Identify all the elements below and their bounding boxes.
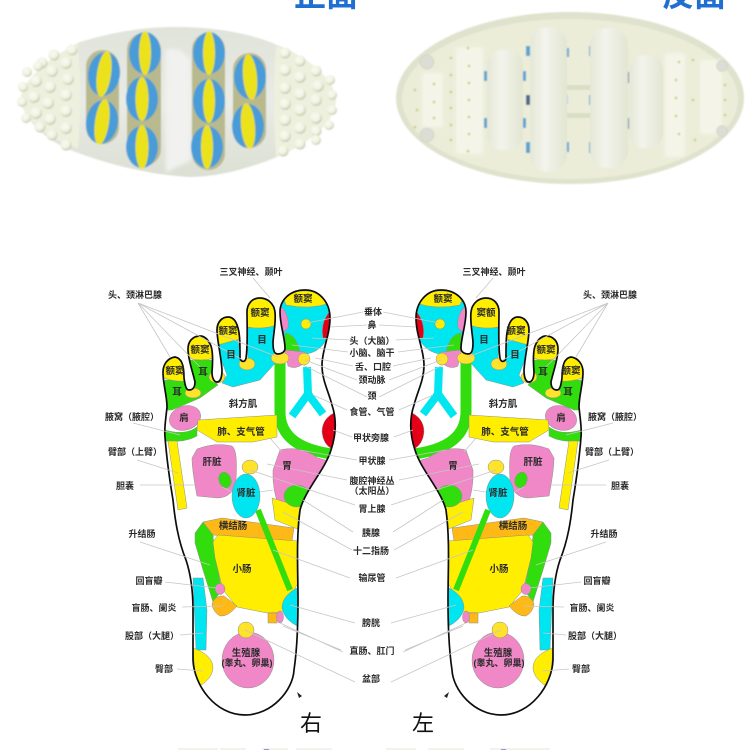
cecum [212,596,237,616]
labels inside right foot: 小肠 [232,563,252,575]
bladder [282,587,299,627]
oesophagus Y [292,367,323,416]
labels inside right foot: 斜方肌 [229,398,258,410]
labels: outer left column: 三叉神经、颞叶 [219,266,283,277]
anus [276,611,284,623]
labels inside left foot: 胃 [448,461,458,472]
caption: right foot: 右 [300,711,322,736]
rectum block [268,613,277,623]
labels: centre column: 头（大脑） [349,335,395,346]
labels inside right foot: 额窦 [293,293,313,305]
labels inside left foot: 耳 [563,387,573,398]
pancreas and duodenum [272,498,304,530]
labels inside left foot: 额窦 [433,293,453,305]
buttock [193,648,213,688]
right bump zone [274,46,337,157]
labels inside right foot: 目 [226,350,236,361]
labels inside right foot: 肩 [179,412,189,424]
labels inside right foot: 肾脏 [236,487,256,499]
back rim [396,12,744,184]
shoulder [166,402,204,434]
labels: centre column: 膀胱 [362,617,380,628]
stomach [273,449,332,510]
labels: outer right column: 回盲瓣 [583,575,611,586]
labels inside right foot: 额窦 [165,365,185,377]
blue and yellow rollers [83,31,266,169]
labels inside right foot: 目 [257,335,267,346]
labels: centre column [349,306,395,684]
caption: left foot: 左 [412,711,434,736]
lung and bronchus [197,415,277,442]
big toe: temporal lobe [278,305,288,332]
left ribs [422,47,722,157]
labels: outer left column [105,266,283,674]
labels inside left foot [433,293,581,668]
labels: outer right column: 臂部（上臂） [585,446,639,457]
labels: outer right column: 三叉神经、颞叶 [462,266,526,277]
ascending colon [195,522,222,602]
labels: outer right column [462,266,642,674]
labels: centre column: 垂体 [364,306,382,317]
transverse colon [203,518,294,541]
product photo: front of foot massager [17,27,337,177]
labels inside left foot: 肺、支气管 [481,426,529,438]
labels: outer left column: 臀部 [155,663,173,674]
labels: outer left column: 臂部（上臂） [108,446,162,457]
labels inside left foot: 肩 [556,412,566,424]
labels: centre column: 舌、口腔 [355,361,391,372]
spine band [280,362,332,454]
labels: centre column: 十二指肠 [353,545,389,556]
labels: outer right column: 头、颈淋巴腺 [583,289,637,300]
labels inside right foot: 肝脏 [202,456,222,468]
labels inside right foot: 肺、支气管 [217,426,265,438]
labels: centre column: 腹腔神经丛 [349,475,395,486]
blue roller tabs [484,46,631,153]
labels: outer right column: 升结肠 [590,528,618,539]
product photo: back of foot massager [396,12,744,184]
genital gland [222,632,274,688]
neck pad [271,352,289,364]
labels: outer left column: 头、颈淋巴腺 [108,289,162,300]
labels inside right foot: 额窦 [190,344,210,356]
labels inside right foot: 横结肠 [219,520,248,532]
big toe: brain area [277,290,331,354]
labels: outer right column: 胆囊 [611,480,629,491]
labels inside left foot: 额窦 [561,365,581,377]
labels: outer right column: 腋窝（腋腔） [588,411,642,422]
ileocecal valve [215,584,225,594]
back inner shell [402,19,738,179]
labels: centre column: 小脑、脑干 [349,347,395,358]
shoulder base [165,427,197,441]
roller covers [487,27,663,172]
massager body [20,27,336,177]
toes 2 and 3 eye zone [217,324,278,387]
adrenal gland pad [242,460,258,474]
labels: outer right column: 盲肠、阑炎 [569,602,615,613]
foot chart: right foot artwork [133,278,367,715]
labels inside left foot: 目 [510,350,520,361]
ureter [258,510,290,590]
labels: centre column: 鼻 [367,319,377,330]
labels inside right foot: 额窦 [218,325,238,337]
labels: centre column: 直肠、肛门 [349,645,395,656]
labels: outer left column: 股部（大腿） [125,630,179,641]
labels: outer left column: 升结肠 [128,528,156,539]
toe sinus caps [160,296,277,381]
vent dots [414,47,726,152]
cross bars [564,85,592,118]
adrenal [284,485,310,507]
centre light strip [166,49,191,172]
gallbladder [217,470,233,490]
labels: centre column: 甲状旁腺 [353,432,389,443]
roller slots [86,33,266,170]
labels inside left foot: 肾脏 [488,487,508,499]
labels: centre column: 盆部 [362,673,380,684]
labels inside left foot: 斜方肌 [489,398,518,410]
labels inside left foot: 生殖腺 [484,647,513,659]
big toe: frontal sinus [281,291,330,307]
labels: centre column: 输尿管 [358,572,386,583]
labels inside right foot: (睾丸、卵巢) [222,657,272,668]
big toe: nose side [322,310,332,338]
labels inside right foot: 生殖腺 [232,647,261,659]
labels: outer right column: 股部（大腿） [568,630,622,641]
labels inside left foot: 额窦 [506,325,526,337]
labels inside left foot: 耳 [538,367,548,378]
pituitary [301,319,311,329]
labels inside left foot: 目 [479,335,489,346]
labels inside left foot: (睾丸、卵巢) [474,657,524,668]
labels: outer left column: 回盲瓣 [135,575,163,586]
toe joint pads [185,353,310,398]
labels inside right foot: 额窦 [250,307,270,319]
labels: centre column: （太阳丛） [349,485,395,496]
parathyroid [322,412,338,449]
tongue and mouth [285,350,305,368]
cerebellum [285,333,300,352]
leader lines [133,278,367,682]
coloured reflex zones [160,290,338,688]
labels inside left foot: 额窦 [536,344,556,356]
labels: centre column: 甲状腺 [358,455,386,466]
labels inside right foot: 耳 [172,387,182,398]
labels inside right foot: 胃 [282,461,292,472]
liver [192,445,236,498]
kidney [232,474,260,518]
labels: outer left column: 胆囊 [116,480,134,491]
foot chart: left foot artwork (mirror of right) [379,278,613,715]
labels: centre column: 胃上腺 [358,503,386,514]
labels: centre column: 颈动脉 [358,374,386,385]
direction mark [297,692,302,698]
labels: outer left column: 盲肠、阑炎 [131,602,177,613]
pelvis [238,622,254,638]
labels: outer right column: 臀部 [572,663,590,674]
labels: centre column: 食管、气管 [349,406,395,417]
left bump zone [17,44,80,150]
labels inside left foot: 小肠 [489,563,509,575]
small intestine [213,535,298,613]
toes 4 and 5 ear zone [163,360,218,410]
foot outline [163,290,335,715]
labels: centre column: 胰腺 [362,527,380,538]
upper arm [168,441,187,510]
labels: centre column: 颈 [367,391,377,401]
thigh [193,578,207,650]
labels: outer left column: 腋窝（腋腔） [105,411,159,422]
labels inside left foot: 窦额 [476,307,496,319]
rubber feet pegs [420,55,728,142]
labels inside left foot: 肝脏 [523,456,543,468]
labels inside right foot [165,293,313,668]
labels inside left foot: 横结肠 [499,520,528,532]
labels inside right foot: 耳 [198,367,208,378]
